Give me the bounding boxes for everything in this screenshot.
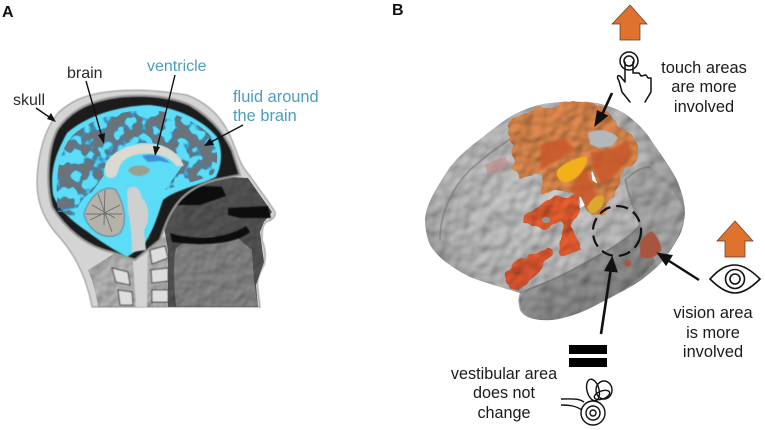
icon: inner ear bbox=[561, 378, 612, 425]
label: ventricle bbox=[147, 58, 207, 156]
vertebrae bbox=[112, 246, 168, 305]
cerebrospinal fluid area bbox=[52, 105, 221, 257]
central activation hole bbox=[542, 217, 550, 223]
label: ventricle: ventricle bbox=[147, 58, 207, 75]
head outer skin bbox=[37, 90, 275, 307]
text: touch areas are more involved bbox=[661, 59, 747, 116]
white slits bbox=[580, 172, 596, 207]
arrow: vision area pointer bbox=[659, 254, 699, 280]
cortex outlines bbox=[57, 110, 217, 217]
arrow: vestibular area pointer bbox=[601, 259, 616, 334]
text: vestibular area does not change bbox=[451, 365, 557, 422]
arrow: up touch bbox=[612, 5, 647, 40]
red activation: vision area bbox=[624, 232, 661, 267]
label: brain: brain bbox=[67, 65, 103, 82]
icon: eye bbox=[710, 265, 760, 293]
cerebellum folds bbox=[86, 190, 122, 232]
thalamus bbox=[128, 166, 150, 176]
sulci bbox=[440, 130, 650, 293]
text: vestibular area does not change: does not bbox=[473, 384, 536, 402]
brain base bbox=[425, 102, 685, 320]
yellow focus lower bbox=[587, 195, 604, 214]
panel B: 3D brain with activation bbox=[425, 5, 760, 425]
arrow: up vision bbox=[717, 221, 753, 257]
skull dark band bbox=[48, 96, 240, 260]
red activation: central bbox=[526, 195, 580, 257]
neck tissue bbox=[88, 235, 172, 307]
panel A: head MRI scan bbox=[13, 58, 319, 307]
text: vision area is more involved bbox=[673, 304, 754, 361]
corpus callosum bbox=[105, 144, 184, 178]
cortex gyri bbox=[57, 110, 217, 217]
temporal lobe bbox=[520, 225, 662, 320]
label: fluid around the brain: fluid around bbox=[233, 88, 319, 106]
icon: equals sign bbox=[569, 345, 607, 367]
icon: touch hand bbox=[618, 52, 651, 102]
touch activation: orange region bbox=[507, 102, 637, 217]
text: touch areas are more involved: touch areas bbox=[661, 59, 747, 77]
label: fluid around the brain bbox=[204, 88, 319, 146]
label: brain bbox=[67, 65, 105, 144]
label: skull: skull bbox=[13, 92, 45, 109]
gray gap in activation bbox=[588, 130, 618, 148]
nasal airway bbox=[170, 186, 271, 244]
pale activation patches bbox=[485, 157, 510, 175]
cerebellum bbox=[84, 188, 124, 236]
label: skull bbox=[13, 92, 56, 122]
yellow focus upper bbox=[557, 157, 587, 182]
text: vision area is more involved: vision area bbox=[673, 304, 754, 322]
lower face tissue bbox=[160, 176, 272, 307]
spinal cord bbox=[132, 245, 148, 307]
dashed circle: vestibular area bbox=[587, 201, 647, 261]
occipital lobe bbox=[625, 167, 685, 267]
panel label: A: A bbox=[2, 4, 14, 21]
text: vision area is more involved: involved bbox=[683, 343, 743, 361]
text: vestibular area does not change: change bbox=[477, 404, 531, 422]
text: vestibular area does not change: vestibular area bbox=[451, 365, 557, 383]
text: vision area is more involved: is more bbox=[686, 324, 740, 342]
red activation: lower bbox=[505, 247, 553, 290]
brainstem bbox=[127, 187, 148, 252]
red streaks in touch activation bbox=[540, 138, 632, 210]
text: touch areas are more involved: are more bbox=[671, 78, 737, 96]
oral cavity tissue bbox=[174, 236, 258, 307]
ventricle highlight bbox=[142, 155, 170, 163]
panel label: B: B bbox=[392, 2, 404, 19]
text: touch areas are more involved: involved bbox=[674, 98, 734, 116]
arrow: touch area pointer bbox=[596, 93, 612, 124]
label: fluid around the brain: the brain bbox=[233, 107, 297, 125]
